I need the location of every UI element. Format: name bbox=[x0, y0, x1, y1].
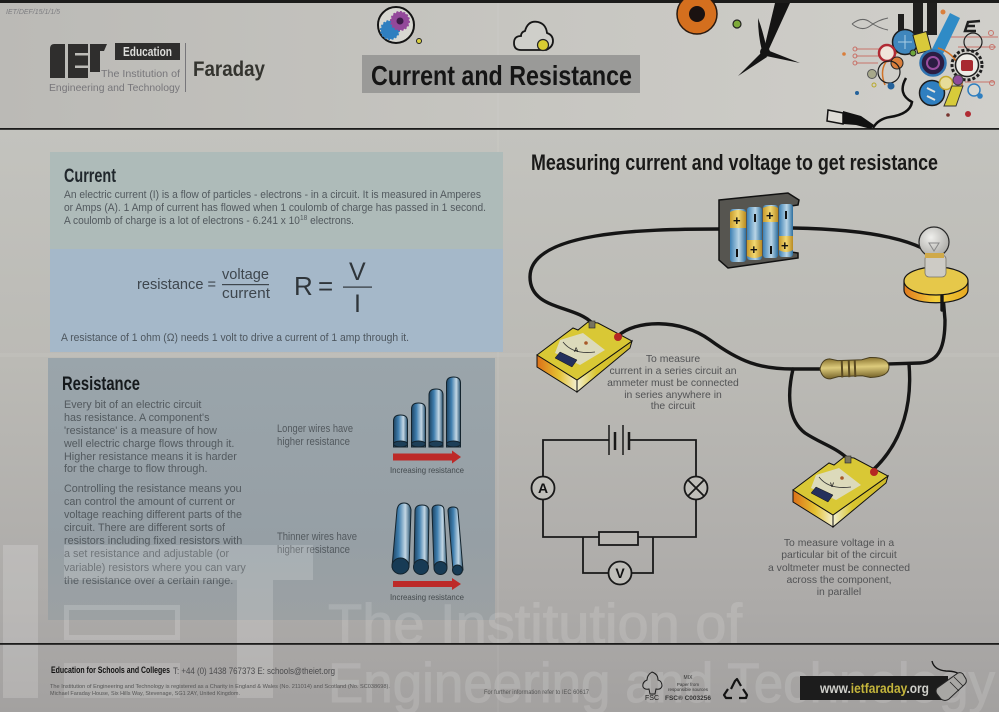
current text block: An electric current (I) is a flow of particles - electrons - in a circuit. It is measured in Amperes bbox=[64, 189, 482, 201]
voltmeter bbox=[793, 456, 888, 527]
resistance text block: circuit. There are different sorts of bbox=[64, 522, 226, 534]
battery pack: + bbox=[781, 238, 789, 253]
symbol: voltmeter: V bbox=[615, 565, 625, 581]
wires bbox=[530, 228, 945, 470]
current text block bbox=[64, 189, 486, 227]
symbol: resistor bbox=[599, 532, 638, 545]
arrow: increasing resistance (length) bbox=[393, 450, 461, 464]
caption: ammeter: current in a series circuit an bbox=[609, 366, 737, 377]
longer wires caption: Longer wires have bbox=[277, 423, 353, 435]
badge: education bbox=[115, 43, 180, 60]
chart: longer wires bbox=[394, 377, 460, 447]
symbol formula: I bbox=[354, 290, 361, 318]
battery pack bbox=[719, 193, 799, 268]
thinner wires caption: Thinner wires have bbox=[277, 531, 357, 543]
longer wires caption bbox=[277, 423, 353, 448]
caption: voltmeter: a voltmeter must be connected bbox=[768, 563, 910, 574]
footer contact: Education for Schools and Colleges bbox=[51, 665, 170, 675]
icon: FSC: FSC bbox=[645, 695, 659, 702]
logo: IET: The Institution of bbox=[101, 68, 180, 80]
resistance text block: resistors including fixed resistors with bbox=[64, 535, 242, 547]
caption: voltmeter: particular bit of the circuit bbox=[781, 550, 897, 561]
logo: IET: Engineering and Technology bbox=[49, 82, 181, 94]
panel: resistance bbox=[48, 358, 495, 620]
thinner wires caption: higher resistance bbox=[277, 544, 350, 556]
collage: technology icons bbox=[842, 3, 998, 128]
label: increasing resistance: Increasing resistance bbox=[390, 465, 464, 475]
word formula bbox=[137, 266, 271, 302]
footer contact bbox=[50, 665, 390, 697]
icon: gears bbox=[378, 7, 422, 44]
watermark: IET institution: The Institution of bbox=[328, 592, 742, 655]
icon: mouse bbox=[932, 661, 966, 700]
symbol formula: V bbox=[349, 258, 366, 286]
symbol formula: R bbox=[294, 271, 313, 301]
bulb bbox=[904, 227, 968, 310]
circuit diagram bbox=[532, 425, 708, 584]
title bbox=[362, 55, 640, 93]
FSC mix text bbox=[665, 675, 711, 702]
ohm note: A resistance of 1 ohm (Ω) needs 1 volt to drive a current of 1 amp through it. bbox=[61, 332, 409, 344]
symbol: voltmeter bbox=[608, 562, 632, 584]
handwritten reference: IET/DEF/15/1/1/5 bbox=[6, 9, 60, 16]
resistance text block: 'resistance' is a measure of how bbox=[64, 425, 217, 437]
ammeter: A bbox=[574, 348, 579, 354]
footer contact: Michael Faraday House, Six Hills Way, Stevenage, SG1 2AY, United Kingdom. bbox=[50, 691, 240, 697]
resistance text block: variable) resistors where you can vary bbox=[64, 562, 246, 574]
icon: FSC bbox=[643, 672, 662, 702]
logo: IET bbox=[49, 43, 265, 94]
word formula: current bbox=[222, 285, 271, 302]
caption: ammeter: ammeter must be connected bbox=[607, 378, 739, 389]
heading: resistance: Resistance bbox=[62, 374, 140, 395]
footer contact: T: +44 (0) 1438 767373 E: schools@theiet.org bbox=[173, 666, 335, 677]
current text block: or Amps (A). 1 Amp of current has flowed when 1 coulomb of charge has passed in 1 second. bbox=[64, 202, 486, 214]
symbol: lamp bbox=[684, 476, 708, 500]
battery pack: + bbox=[733, 213, 741, 228]
symbol: ammeter bbox=[532, 476, 554, 500]
resistance text block: can control the amount of current or bbox=[64, 496, 235, 508]
watermark: IET institution bbox=[3, 545, 995, 712]
resistance text block: Higher resistance means it is harder bbox=[64, 451, 237, 463]
icon: cloud bbox=[514, 22, 553, 50]
current text block: A coulomb of charge is a lot of electrons - 6.241 x 10 bbox=[64, 215, 315, 227]
resistance text block: voltage reaching different parts of the bbox=[64, 509, 242, 521]
caption: ammeter: in series anywhere in bbox=[624, 390, 722, 401]
symbol: ammeter: A bbox=[538, 480, 548, 496]
word formula: voltage bbox=[222, 266, 269, 283]
caption: voltmeter: To measure voltage in a bbox=[784, 538, 894, 549]
panel: current bbox=[50, 152, 503, 249]
current text block: 18 bbox=[300, 215, 307, 222]
resistance text block: well electric charge flows through it. bbox=[63, 438, 234, 450]
FSC mix text: responsible sources bbox=[668, 687, 709, 692]
caption: voltmeter: in parallel bbox=[817, 587, 861, 598]
resistance text block: Controlling the resistance means you bbox=[64, 483, 242, 495]
badge: education: Education bbox=[123, 45, 172, 59]
website bar: www.ietfaraday.org bbox=[819, 680, 929, 696]
footer reference: For further information refer to IEC 60617 bbox=[484, 690, 590, 696]
icon: wind turbine bbox=[738, 3, 800, 76]
heading: current: Current bbox=[64, 166, 117, 187]
logo: IET: Faraday bbox=[193, 58, 265, 81]
caption: ammeter: the circuit bbox=[651, 401, 695, 412]
battery pack: + bbox=[750, 242, 758, 257]
caption: voltmeter: across the component, bbox=[786, 575, 892, 586]
resistance text block: a set resistance and adjustable (or bbox=[64, 548, 229, 560]
symbol formula bbox=[294, 258, 372, 318]
symbol formula: = bbox=[318, 271, 333, 301]
resistor bbox=[820, 357, 889, 379]
ammeter bbox=[537, 321, 632, 392]
longer wires caption: higher resistance bbox=[277, 436, 350, 448]
title: Current and Resistance bbox=[371, 60, 632, 91]
battery pack: + bbox=[766, 208, 774, 223]
icon: recycling bbox=[724, 679, 747, 698]
caption: ammeter: To measure bbox=[646, 354, 700, 365]
arrow: increasing resistance (thickness) bbox=[393, 578, 461, 590]
resistance text block: the resistance over a certain range. bbox=[64, 575, 233, 587]
word formula: resistance = bbox=[137, 276, 216, 293]
footer contact: The Institution of Engineering and Technology is registered as a Charity in England & Wales (No. 211014) and Scotland (No. SC038698). bbox=[50, 684, 390, 690]
icon: orange target bbox=[677, 0, 741, 34]
circuit illustration bbox=[530, 193, 968, 527]
website bar bbox=[800, 676, 948, 700]
current text block: electrons. bbox=[307, 215, 354, 227]
resistance text block: has resistance. A component's bbox=[64, 412, 210, 424]
FSC mix text: FSC® C003256 bbox=[665, 694, 711, 702]
resistance text block: Every bit of an electric circuit bbox=[64, 399, 201, 411]
panel: formula bbox=[50, 249, 503, 352]
caption: voltmeter bbox=[768, 538, 910, 598]
resistance text block bbox=[63, 399, 246, 587]
FSC mix text: MIX bbox=[684, 675, 693, 681]
resistance text block: for the charge to flow through. bbox=[64, 463, 207, 475]
label: increasing resistance: Increasing resistance bbox=[390, 592, 464, 602]
FSC mix text: Paper from bbox=[677, 682, 699, 687]
thinner wires caption bbox=[277, 531, 357, 556]
caption: ammeter bbox=[607, 354, 739, 412]
icon: USB plug bbox=[827, 110, 874, 129]
voltmeter: V bbox=[830, 483, 834, 489]
chart: thinner wires bbox=[392, 503, 463, 575]
